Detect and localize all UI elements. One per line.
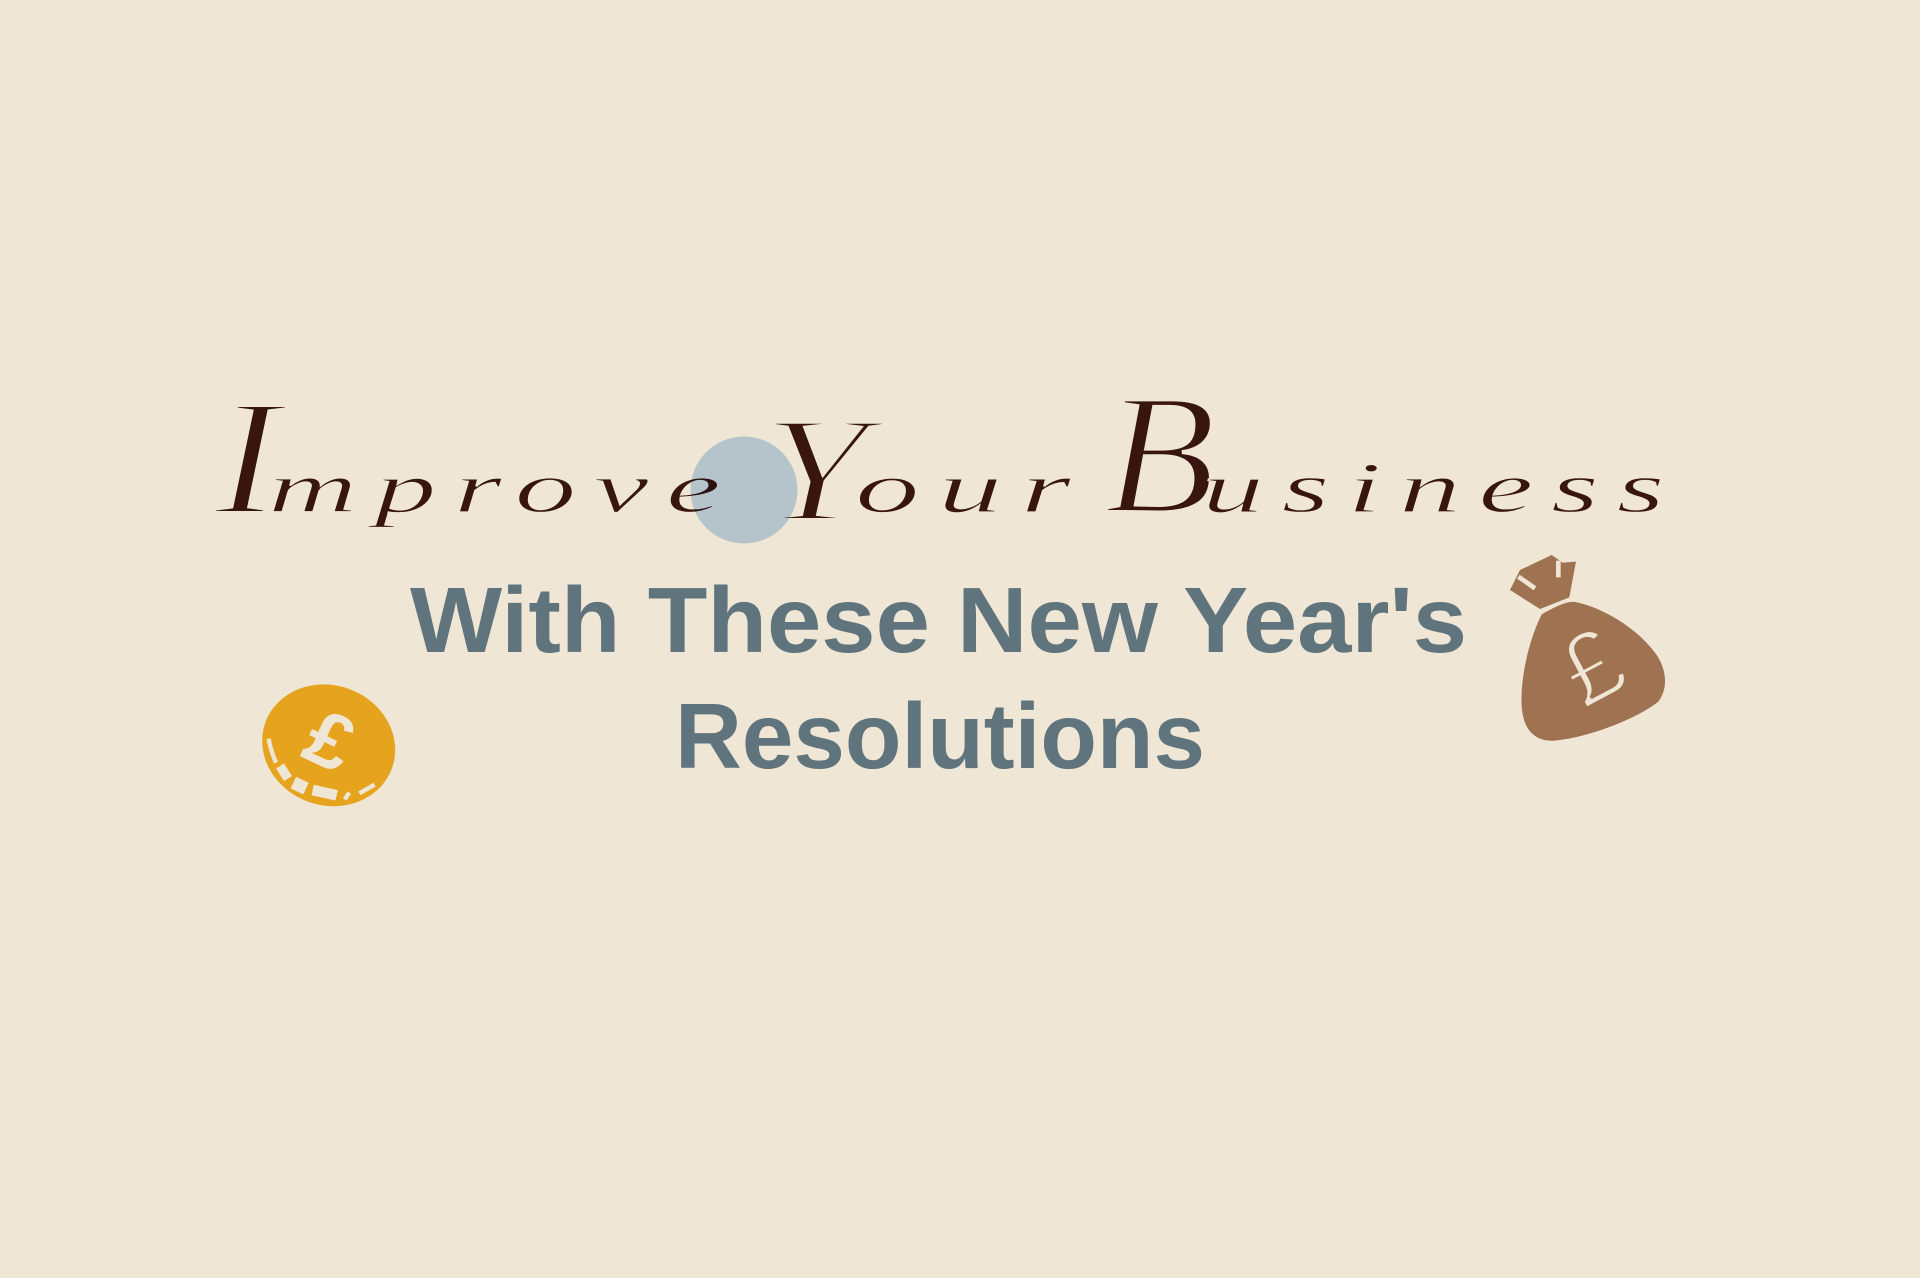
script title: Improve Your Business: Y <box>762 387 885 553</box>
subtitle: With These New Year's Resolutions <box>410 568 1467 788</box>
pound sign on bag: £ <box>1541 604 1643 729</box>
pound sign on coin: £ <box>292 691 368 789</box>
decorative blue circle behind title <box>690 436 798 544</box>
bag body <box>1521 602 1665 741</box>
icon: money bag with pound sign <box>1510 555 1665 741</box>
bag tie <box>1510 555 1576 609</box>
script title: Improve Your Business: I <box>213 366 288 549</box>
subtitle line 2: Resolutions <box>675 684 1205 788</box>
subtitle line 1: With These New Year's <box>410 568 1467 672</box>
bag tie creases <box>1518 561 1558 588</box>
script title: Improve Your Business: our <box>855 448 1089 528</box>
script title: Improve Your Business: B <box>1104 360 1216 550</box>
icon: gold pound coin <box>245 666 412 825</box>
script title: Improve Your Business: mprove <box>268 448 738 528</box>
script title: Improve Your Business: usiness <box>1202 448 1682 528</box>
coin rim notches <box>269 739 375 799</box>
